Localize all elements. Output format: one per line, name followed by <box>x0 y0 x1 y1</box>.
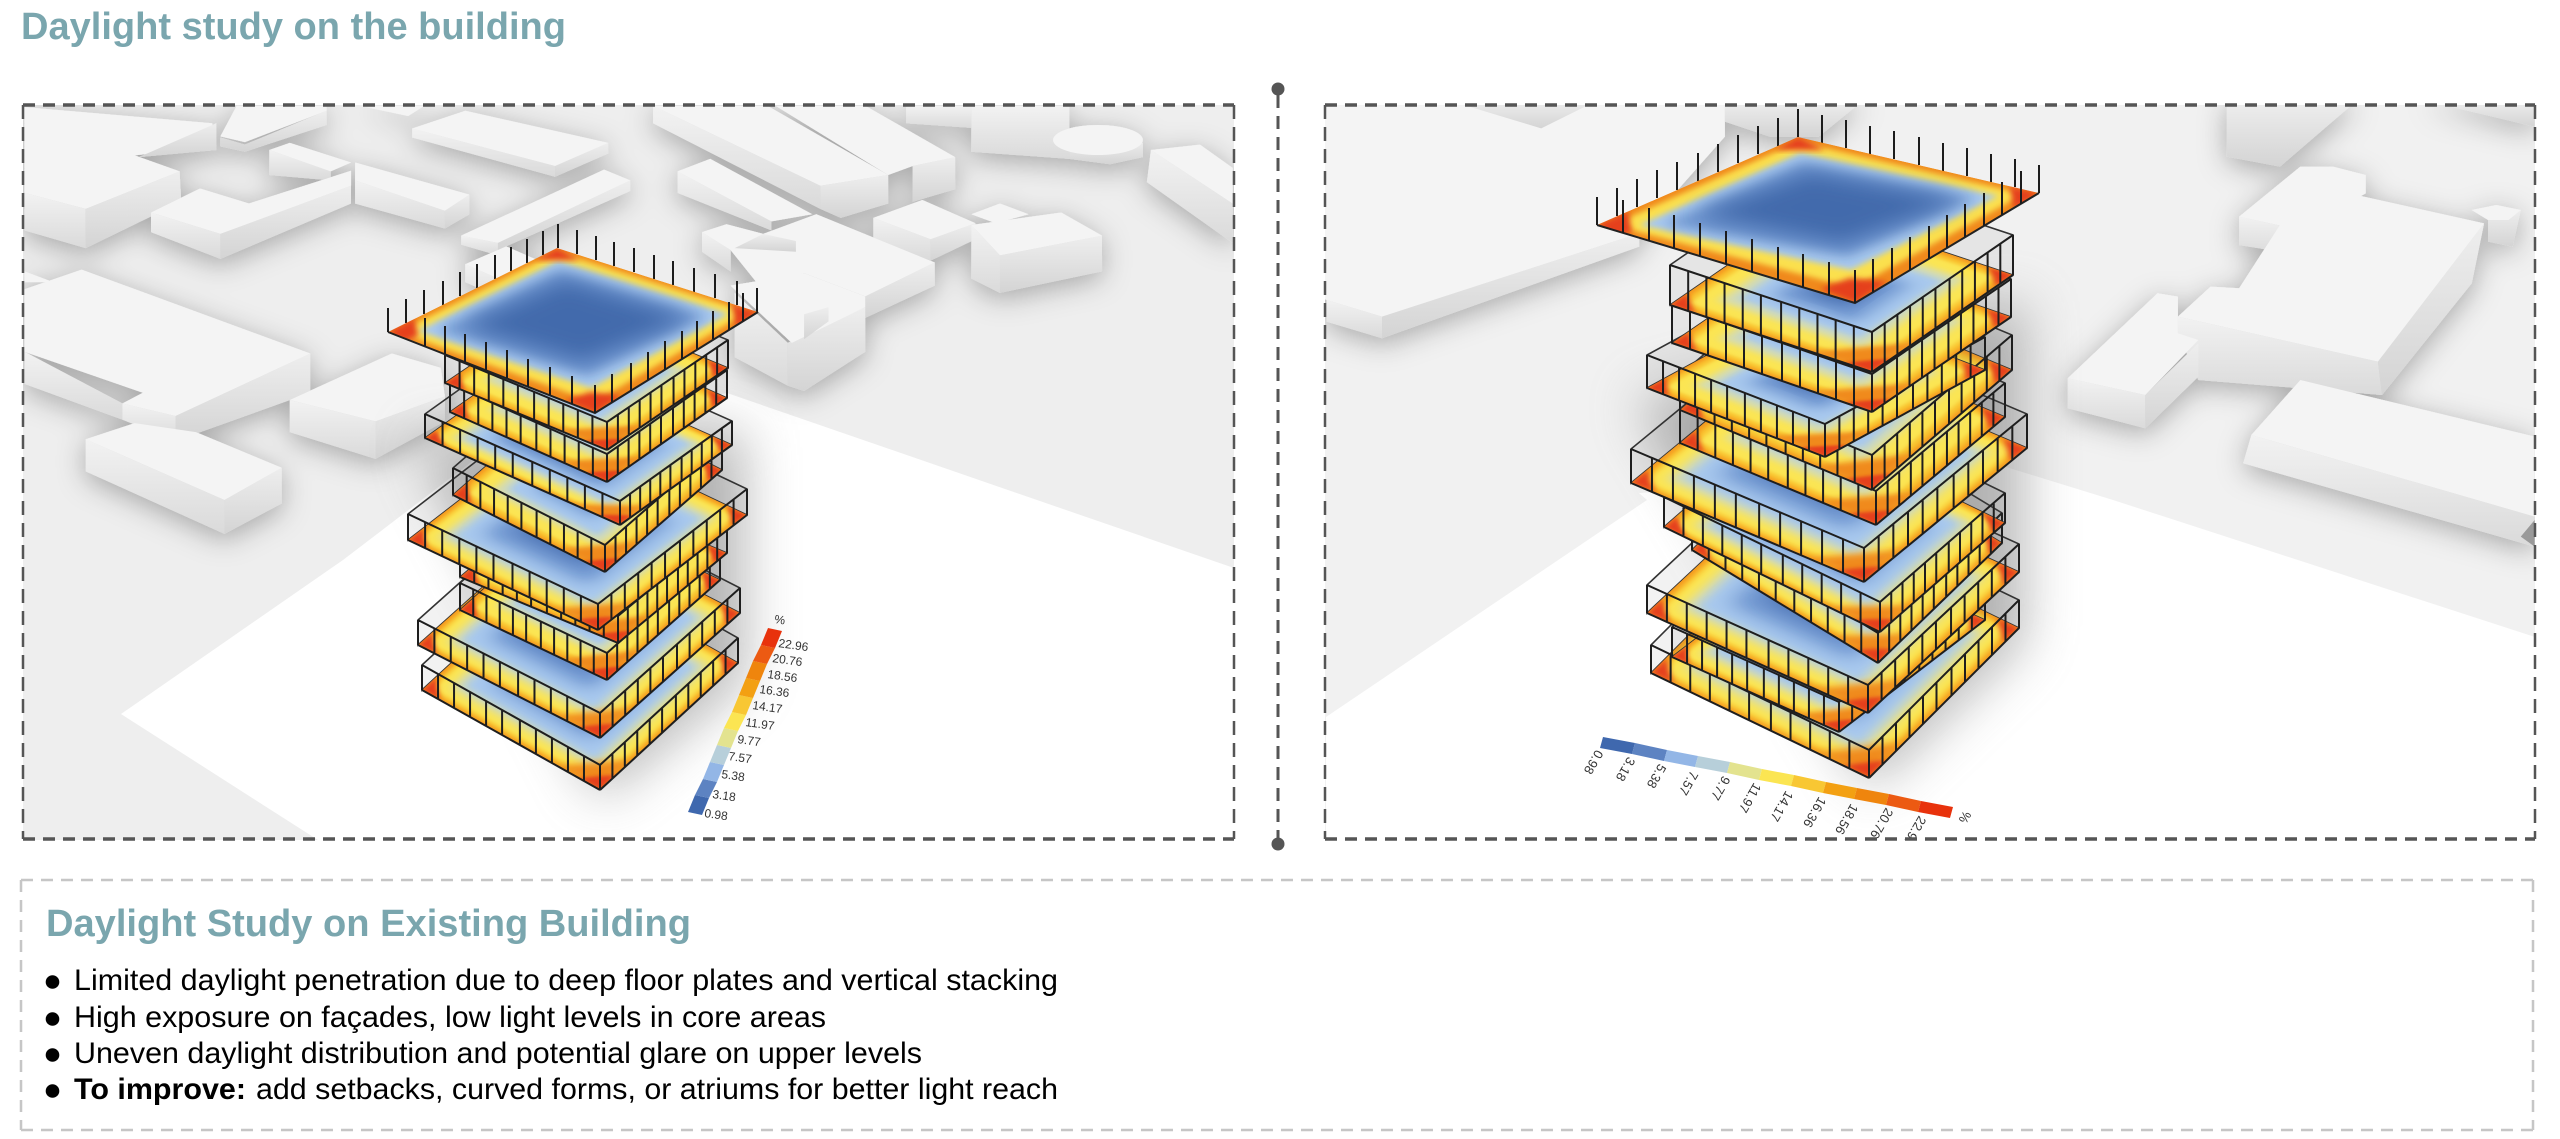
floor 10 <box>421 629 739 791</box>
floor 2 <box>1671 604 1986 733</box>
panel: right daylight view <box>1313 100 2535 849</box>
bullet 4: add setbacks, curved forms, or atriums for better light reach <box>256 1073 1058 1106</box>
bullet 3: Uneven daylight distribution and potential glare on upper levels <box>74 1037 922 1070</box>
tower ground shadow <box>1635 300 2025 790</box>
panel frame left <box>23 105 1234 839</box>
daylight legend: 9.77 <box>1708 774 1733 803</box>
daylight legend <box>688 612 810 823</box>
floor 10 <box>1672 210 2011 412</box>
daylight legend: 22.96 <box>1900 814 1929 849</box>
daylight legend: 3.18 <box>1613 754 1638 784</box>
panel frame right <box>1325 105 2535 839</box>
top floor plate <box>1597 109 2039 303</box>
floor 2 <box>444 336 729 451</box>
floor 11 <box>1670 168 2013 372</box>
floor 5 <box>1664 388 2005 632</box>
daylight legend: 14.17 <box>1767 788 1796 824</box>
daylight legend: 11.97 <box>1736 780 1764 815</box>
floor 6 <box>1631 315 2027 582</box>
daylight legend: 18.56 <box>767 667 799 685</box>
bullet 1: Limited daylight penetration due to deep floor plates and vertical stacking <box>74 964 1058 997</box>
panel: text summary <box>21 880 2533 1130</box>
building tower with daylight floor plates <box>388 224 758 790</box>
daylight legend: 16.36 <box>1800 794 1829 830</box>
daylight legend: 7.57 <box>1676 768 1701 798</box>
floor 7 <box>459 531 728 644</box>
daylight legend: 5.38 <box>721 767 746 784</box>
surrounding context buildings <box>24 106 1233 534</box>
daylight legend: 22.96 <box>778 636 810 654</box>
floor 4 <box>1691 494 2003 664</box>
daylight legend <box>1581 737 1974 849</box>
floor 3 <box>1646 532 2020 714</box>
floor 3 <box>449 370 728 483</box>
summary heading: Daylight Study on Existing Building <box>46 903 691 945</box>
daylight legend: % <box>1955 808 1974 826</box>
title: Daylight study on the building <box>21 6 566 48</box>
floor 9 <box>417 570 741 739</box>
surrounding context buildings <box>1313 100 2535 547</box>
daylight legend: 0.98 <box>1581 748 1606 777</box>
floor 6 <box>407 462 748 631</box>
daylight legend: 16.36 <box>759 682 791 700</box>
centre divider <box>1272 82 1284 850</box>
daylight legend: 14.17 <box>752 698 784 716</box>
daylight legend: 20.76 <box>1867 806 1896 841</box>
daylight legend: 7.57 <box>728 749 753 766</box>
daylight legend: 5.38 <box>1644 762 1669 791</box>
top floor plate <box>388 224 758 413</box>
daylight legend: 20.76 <box>772 651 804 669</box>
floor 8 <box>459 559 721 681</box>
bullet 2: High exposure on façades, low light levels in core areas <box>74 1001 826 1034</box>
panel frame bottom <box>21 880 2533 1130</box>
daylight legend: % <box>774 612 786 628</box>
daylight legend: 0.98 <box>704 806 729 823</box>
daylight legend: 9.77 <box>737 732 762 749</box>
floor 5 <box>452 452 723 573</box>
ground and site plot <box>1325 105 2535 840</box>
floor 9 <box>1647 268 1985 457</box>
floor 4 <box>424 390 733 526</box>
bullet 4: To improve: <box>74 1073 246 1106</box>
ground and site plot <box>23 105 1234 840</box>
floor 1 <box>1650 590 2020 779</box>
tower ground shadow <box>415 430 745 800</box>
floor 7 <box>1680 301 2005 525</box>
daylight legend: 11.97 <box>745 715 776 733</box>
daylight legend: 3.18 <box>712 787 737 804</box>
panel: left daylight view <box>23 105 1234 840</box>
building tower with daylight floor plates <box>1597 109 2039 778</box>
daylight legend: 18.56 <box>1832 802 1861 837</box>
floor 8 <box>1680 255 2012 490</box>
